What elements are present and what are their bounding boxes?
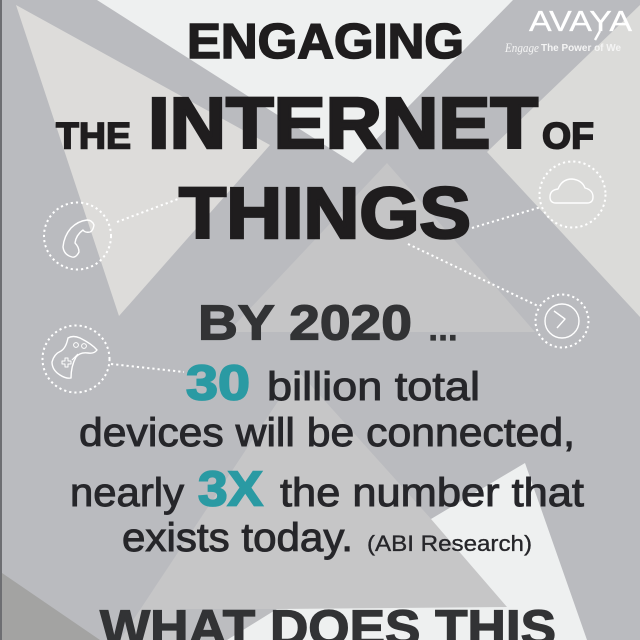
logo: Avaya: Engage [504,40,539,55]
statistic text: the number that [280,471,584,515]
title: THE [56,116,131,156]
title: ENGAGING [187,14,464,69]
logo: Avaya: AVAYA [529,6,633,38]
statistic text [70,356,584,560]
title [56,14,594,254]
icon: phone with connector [44,199,178,270]
statistic text: exists today. [122,516,353,560]
title: OF [542,116,594,156]
heading: by 2020: ... [429,314,457,347]
title: THINGS [179,174,471,254]
title: INTERNET [148,84,538,164]
icon: arrow with connector [408,244,588,348]
icon: game controller with connector [42,326,184,392]
icon: cloud with connector [472,162,606,228]
logo: Avaya: The Power of We [541,42,621,54]
stat: 30 billion: 30 [186,356,250,410]
statistic text: (ABI Research) [367,531,532,556]
heading: by 2020: BY 2020 [198,296,412,350]
statistic text: billion total [267,365,480,409]
logo: Avaya [504,6,633,55]
statistic text: nearly [70,471,184,515]
stat: 3X: 3X [198,462,263,516]
statistic text: devices will be connected, [79,411,575,455]
